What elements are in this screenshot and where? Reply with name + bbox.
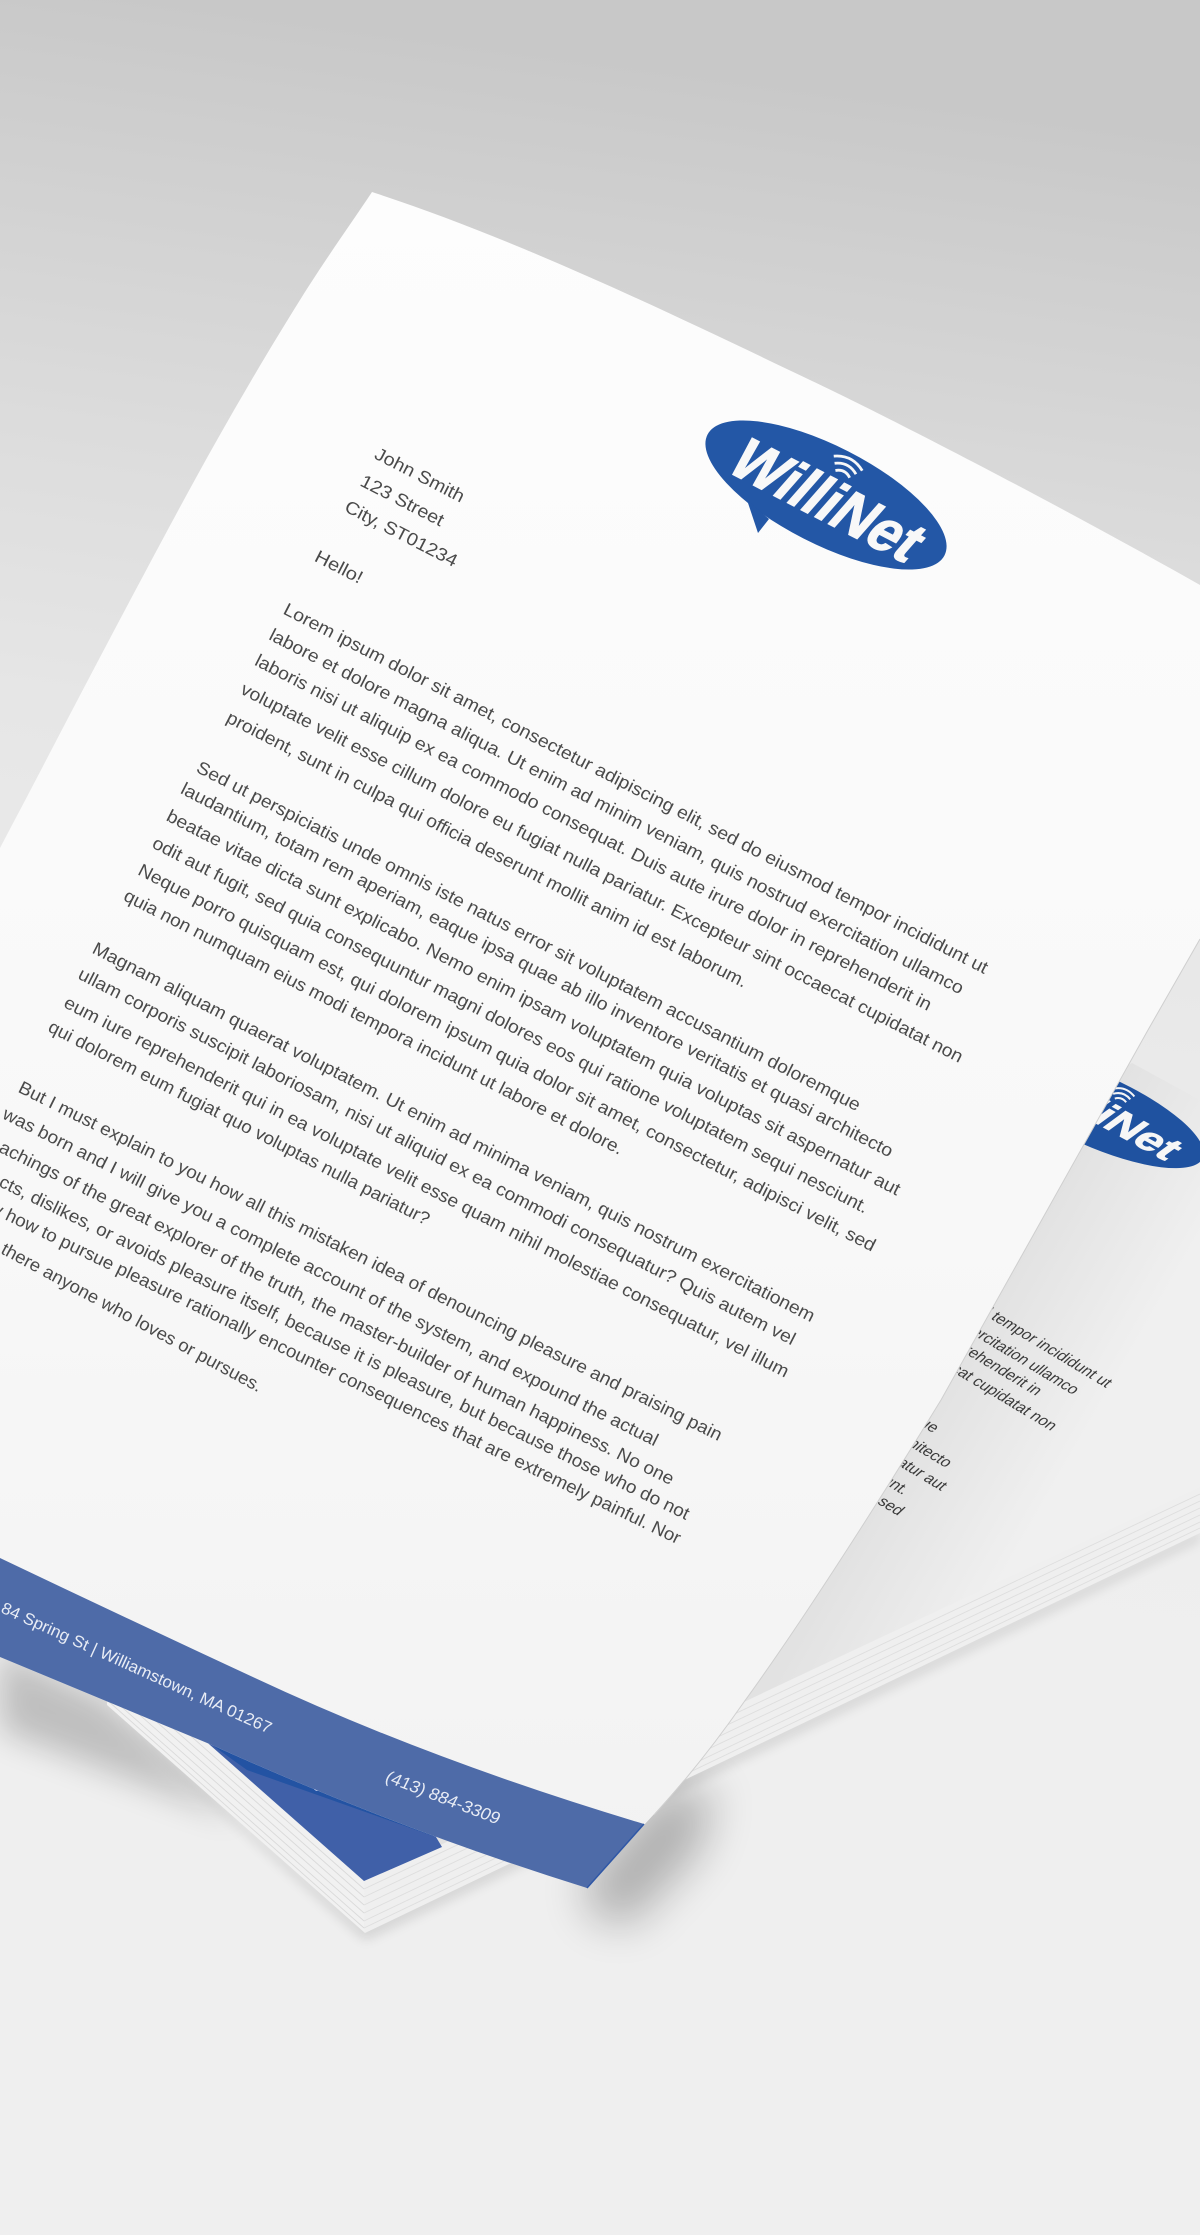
recipient address: John Smith [371, 444, 468, 506]
back sheet body text: Neque porro quisquam est, qui dolorem ipsum quia dolor sit amet, consectetur, adipisci velit, sed [328, 1166, 908, 1519]
footer phone: (413) 884-3309 [382, 1768, 504, 1828]
paragraph 4: But I must explain to you how all this mistaken idea of denouncing pleasure and praising pain [15, 1077, 726, 1445]
paragraph 1 [223, 599, 992, 1067]
back sheet surface [150, 1063, 1200, 1881]
stack left edge [107, 1654, 365, 1933]
back sheet body text [328, 1055, 1116, 1519]
paragraph 3: qui dolorem eum fugiat quo voluptas nulla pariatur? [45, 1017, 433, 1229]
paragraph 1: proident, sunt in culpa qui officia deserunt mollit anim id est laborum. [223, 707, 751, 992]
footer address: 84 Spring St | Williamstown, MA 01267 [0, 1599, 274, 1738]
back sheet body text: laudantium, totam rem aperiam, eaque ipsa quae ab illo inventore veritatis et quasi architecto [396, 1131, 956, 1471]
back sheet body text: voluptate velit esse cillum dolore eu fugiat nulla pariatur. Excepteur sint occaecat cupidatat non [491, 1087, 1061, 1434]
stack right edge [364, 1487, 1200, 1933]
paragraph 2 [121, 757, 904, 1255]
paragraph 1: Lorem ipsum dolor sit amet, consectetur adipiscing elit, sed do eiusmod tempor incididunt ut [280, 599, 992, 978]
front letterhead sheet [0, 192, 1200, 1888]
paragraph 4 [0, 1077, 726, 1548]
back sheet logo: WilliNet [1012, 1061, 1193, 1167]
paragraph 3: eum iure reprehenderit qui in ea voluptate velit esse quam nihil molestiae consequatur, vel illum [61, 992, 792, 1381]
recipient address [342, 444, 468, 571]
paragraph 2: laudantium, totam rem aperiam, eaque ipsa quae ab illo inventore veritatis et quasi architecto [178, 779, 897, 1161]
recipient address: City, ST01234 [342, 496, 461, 571]
paragraph 1: labore et dolore magna aliqua. Ut enim ad minim veniam, quis nostrud exercitation ullamco [266, 625, 967, 998]
back sheet logo [973, 1029, 1200, 1191]
footer band [0, 1558, 644, 1888]
paragraph 4: was born and I will give you a complete account of the system, and expound the actual [0, 1103, 662, 1450]
back sheet body text: Sed ut perspiciatis unde omnis iste natus error sit voluptatem accusantium doloremque [420, 1117, 943, 1436]
sheet paper [0, 192, 1200, 1888]
logo: WilliNet speech bubble [685, 391, 967, 599]
paragraph 3: ullam corporis suscipit laboriosam, nisi ut aliquid ex ea commodi consequatur? Quis autem vel [75, 964, 799, 1349]
ground shadows [0, 1530, 1200, 1940]
paragraph 1: laboris nisi ut aliquip ex ea commodo consequat. Duis aute irure dolor in reprehenderit in [252, 650, 935, 1015]
back footer phone number: (413) 884-3309 [219, 1719, 328, 1797]
paragraph 3: Magnam aliquam quaerat voluptatem. Ut enim ad minima veniam, quis nostrum exercitationem [89, 938, 818, 1326]
paragraph 2: Neque porro quisquam est, qui dolorem ipsum quia dolor sit amet, consectetur, adipisci velit, sed [135, 860, 879, 1255]
logo wordmark: WilliNet [715, 428, 941, 573]
paragraph 2: odit aut fugit, sed quia consequuntur magni dolores eos qui ratione voluptatem sequi nesciunt. [149, 833, 872, 1217]
back sheet body text: odit aut fugit, sed quia consequuntur magni dolores eos qui ratione voluptatem sequi nesciunt. [347, 1154, 913, 1498]
paragraph 4: teachings of the great explorer of the truth, the master-builder of human happiness. No one [0, 1130, 677, 1489]
paragraph 2: quia non numquam eius modi tempora incidunt ut labore et dolore. [121, 885, 627, 1159]
paragraph 2: Sed ut perspiciatis unde omnis iste natus error sit voluptatem accusantium doloremque [193, 757, 864, 1115]
back sheet body text: beatae vitae dicta sunt explicabo. Nemo enim ipsam voluptatem quia voluptas sit aspernatur aut [374, 1143, 951, 1494]
paragraph 1: voluptate velit esse cillum dolore eu fugiat nulla pariatur. Excepteur sint occaecat cupidatat non [238, 679, 967, 1067]
back letterhead stack [107, 1029, 1200, 1933]
paragraph 2: beatae vitae dicta sunt explicabo. Nemo enim ipsam voluptatem quia voluptas sit aspernatur aut [163, 806, 904, 1199]
back sheet footer band [150, 1690, 442, 1881]
back logo wifi icon [1109, 1085, 1136, 1104]
greeting: Hello! [312, 546, 366, 588]
letter text [0, 444, 992, 1548]
back sheet body text: labore et dolore magna aliqua. Ut enim ad minim veniam, quis nostrud exercitation ullamco [537, 1066, 1083, 1398]
logo bubble [685, 391, 967, 599]
logo wifi icon [828, 452, 865, 481]
back sheet body text: laboris nisi ut aliquip ex ea commodo consequat. Duis aute irure dolor in reprehenderit in [513, 1074, 1046, 1399]
back sheet body text: Lorem ipsum dolor sit amet, consectetur adipiscing elit, sed do eiusmod tempor incididunt ut [563, 1055, 1116, 1391]
recipient address: 123 Street [357, 471, 447, 530]
